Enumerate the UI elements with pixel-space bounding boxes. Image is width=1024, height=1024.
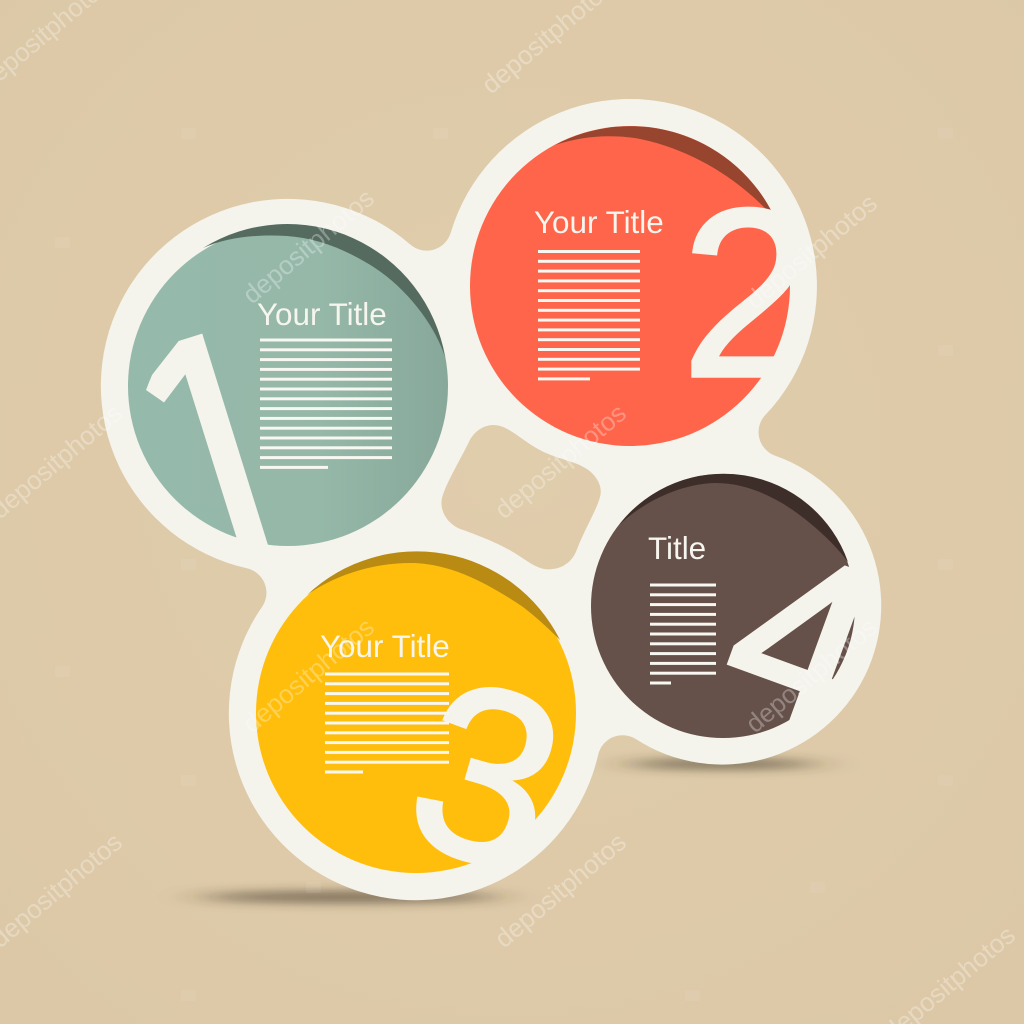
panel: step 2	[470, 126, 814, 446]
title: Your Title	[257, 297, 387, 332]
crescent shadow	[619, 474, 848, 562]
watermarks: depositphotos	[489, 398, 632, 525]
text lines	[325, 672, 449, 774]
crescent shadow	[307, 551, 560, 640]
panel: step 4	[591, 474, 855, 738]
drop shadows	[200, 759, 817, 903]
watermarks: depositphotos	[237, 183, 380, 310]
title: Title	[648, 531, 706, 566]
yellow circle	[256, 553, 576, 873]
red circle	[470, 126, 790, 446]
paper shape with connected circles	[101, 99, 881, 900]
title: Your Title	[320, 629, 450, 664]
number 1: 1	[71, 239, 373, 671]
text lines	[538, 250, 640, 380]
text lines	[650, 584, 716, 684]
teal circle	[128, 226, 448, 546]
crescent shadow	[203, 224, 445, 357]
number 2: 2	[681, 159, 814, 427]
number 4: 4	[695, 492, 912, 790]
title: Your Title	[534, 205, 664, 240]
watermarks: depositphotos	[489, 827, 632, 954]
watermarks: depositphotos	[237, 612, 380, 739]
panel: step 1	[128, 224, 448, 546]
number 3: 3	[384, 625, 590, 925]
watermarks: depositphotos	[740, 188, 883, 315]
watermarks: depositphotos	[740, 612, 883, 739]
crescent shadow	[555, 126, 775, 218]
brown circle	[591, 474, 855, 738]
text lines	[260, 338, 392, 469]
panel: step 3	[256, 551, 590, 925]
